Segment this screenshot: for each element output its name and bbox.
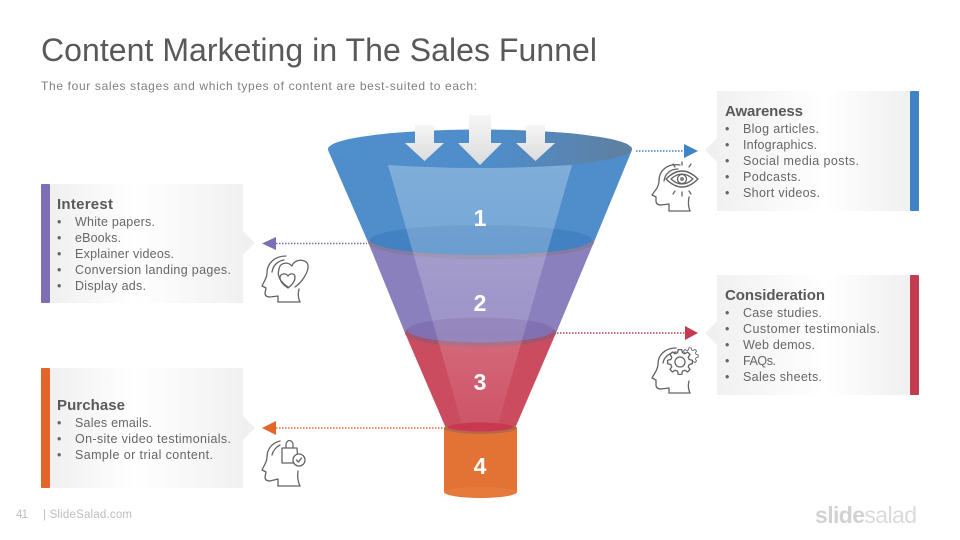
- bullet list: •: [725, 322, 729, 336]
- bullet list: •: [725, 122, 729, 136]
- number 2: 2: [474, 290, 486, 316]
- top opening ellipse: [328, 130, 632, 168]
- panel background: [705, 275, 919, 395]
- rim between stages 1 and 2: [368, 225, 594, 259]
- bullet list: Case studies.: [743, 306, 822, 320]
- panel background: [705, 91, 919, 211]
- subtitle: The four sales stages and which types of content are best-suited to each:: [41, 79, 477, 93]
- bullet list: Social media posts.: [743, 154, 859, 168]
- connector arrow: consideration: [557, 326, 698, 340]
- bullet list: On-site video testimonials.: [75, 432, 231, 446]
- bullet list: eBooks.: [75, 231, 121, 245]
- bullet list: Conversion landing pages.: [75, 263, 231, 277]
- footer site label: | SlideSalad.com: [43, 509, 132, 521]
- accent bar: [910, 91, 919, 211]
- connector arrow: interest: [262, 237, 367, 250]
- footer page number: 41: [16, 509, 28, 521]
- bullet list: Display ads.: [75, 279, 146, 293]
- panel: consideration: [705, 275, 919, 395]
- bullet list: Sales emails.: [75, 416, 152, 430]
- cylinder base ellipse: [444, 487, 517, 497]
- connector arrow: awareness: [636, 144, 698, 158]
- bullet list: •: [57, 215, 61, 229]
- funnel stage 3: red cone: [405, 333, 556, 432]
- rim between stages 2 and 3: [405, 319, 556, 347]
- heading: Awareness: [725, 103, 803, 120]
- bullet list: Sample or trial content.: [75, 448, 213, 462]
- heading: Interest: [57, 196, 113, 213]
- bullet list: Infographics.: [743, 138, 817, 152]
- bullet list: •: [725, 306, 729, 320]
- bullet list: Web demos.: [743, 338, 815, 352]
- funnel stage 4: orange cylinder: [444, 428, 517, 498]
- icon: head with hearts: [262, 256, 308, 302]
- cylinder top rim: [444, 422, 517, 434]
- arrow: right inflow: [516, 125, 555, 161]
- bullet list: •: [725, 338, 729, 352]
- blue ellipse of stage 1 base: [370, 225, 592, 255]
- bullet list: Sales sheets.: [743, 370, 822, 384]
- panel: interest: [41, 184, 255, 303]
- arrow: centre inflow: [458, 115, 502, 165]
- bullet list: •: [57, 432, 61, 446]
- accent bar: [910, 275, 919, 395]
- heading: Consideration: [725, 287, 825, 304]
- accent bar: [41, 368, 50, 488]
- inner light beam: [388, 165, 572, 428]
- title: Content Marketing in The Sales Funnel: [41, 32, 597, 68]
- bullet list: FAQs.: [743, 354, 776, 368]
- funnel stage 2: purple cone: [368, 242, 594, 347]
- bullet list: •: [725, 354, 729, 368]
- bullet list: [57, 215, 231, 293]
- bullet list: •: [725, 154, 729, 168]
- red ellipse at cylinder top: [448, 422, 514, 432]
- bullet list: Podcasts.: [743, 170, 801, 184]
- number 1: 1: [474, 205, 487, 231]
- bullet list: Blog articles.: [743, 122, 819, 136]
- purple ellipse of stage 2 base: [408, 318, 554, 342]
- bullet list: Short videos.: [743, 186, 820, 200]
- bullet list: •: [57, 448, 61, 462]
- funnel stage 1: blue cone: [328, 150, 632, 259]
- bullet list: •: [57, 247, 61, 261]
- icon: head with eye: [652, 162, 698, 211]
- arrow: left inflow: [405, 125, 444, 161]
- accent bar: [41, 184, 50, 303]
- bullet list: Explainer videos.: [75, 247, 174, 261]
- bullet list: •: [725, 186, 729, 200]
- number 3: 3: [474, 369, 486, 395]
- bullet list: White papers.: [75, 215, 155, 229]
- bullet list: [725, 122, 859, 200]
- panel background: [41, 184, 255, 303]
- bullet list: •: [725, 170, 729, 184]
- bullet list: Customer testimonials.: [743, 322, 880, 336]
- bullet list: [725, 306, 880, 384]
- panel: purchase: [41, 368, 255, 488]
- bullet list: [57, 416, 231, 462]
- bullet list: •: [57, 279, 61, 293]
- icon: head with shopping bag: [262, 440, 305, 486]
- bullet list: •: [725, 138, 729, 152]
- bullet list: •: [57, 416, 61, 430]
- funnel: [328, 115, 632, 498]
- logo: slidesalad: [815, 502, 917, 528]
- heading: Purchase: [57, 397, 125, 414]
- panel background: [41, 368, 255, 488]
- bullet list: •: [57, 231, 61, 245]
- number 4: 4: [474, 453, 487, 479]
- panel: awareness: [705, 91, 919, 211]
- bullet list: •: [57, 263, 61, 277]
- icon: head with gears: [652, 348, 698, 393]
- bullet list: •: [725, 370, 729, 384]
- connector arrow: purchase: [262, 421, 443, 435]
